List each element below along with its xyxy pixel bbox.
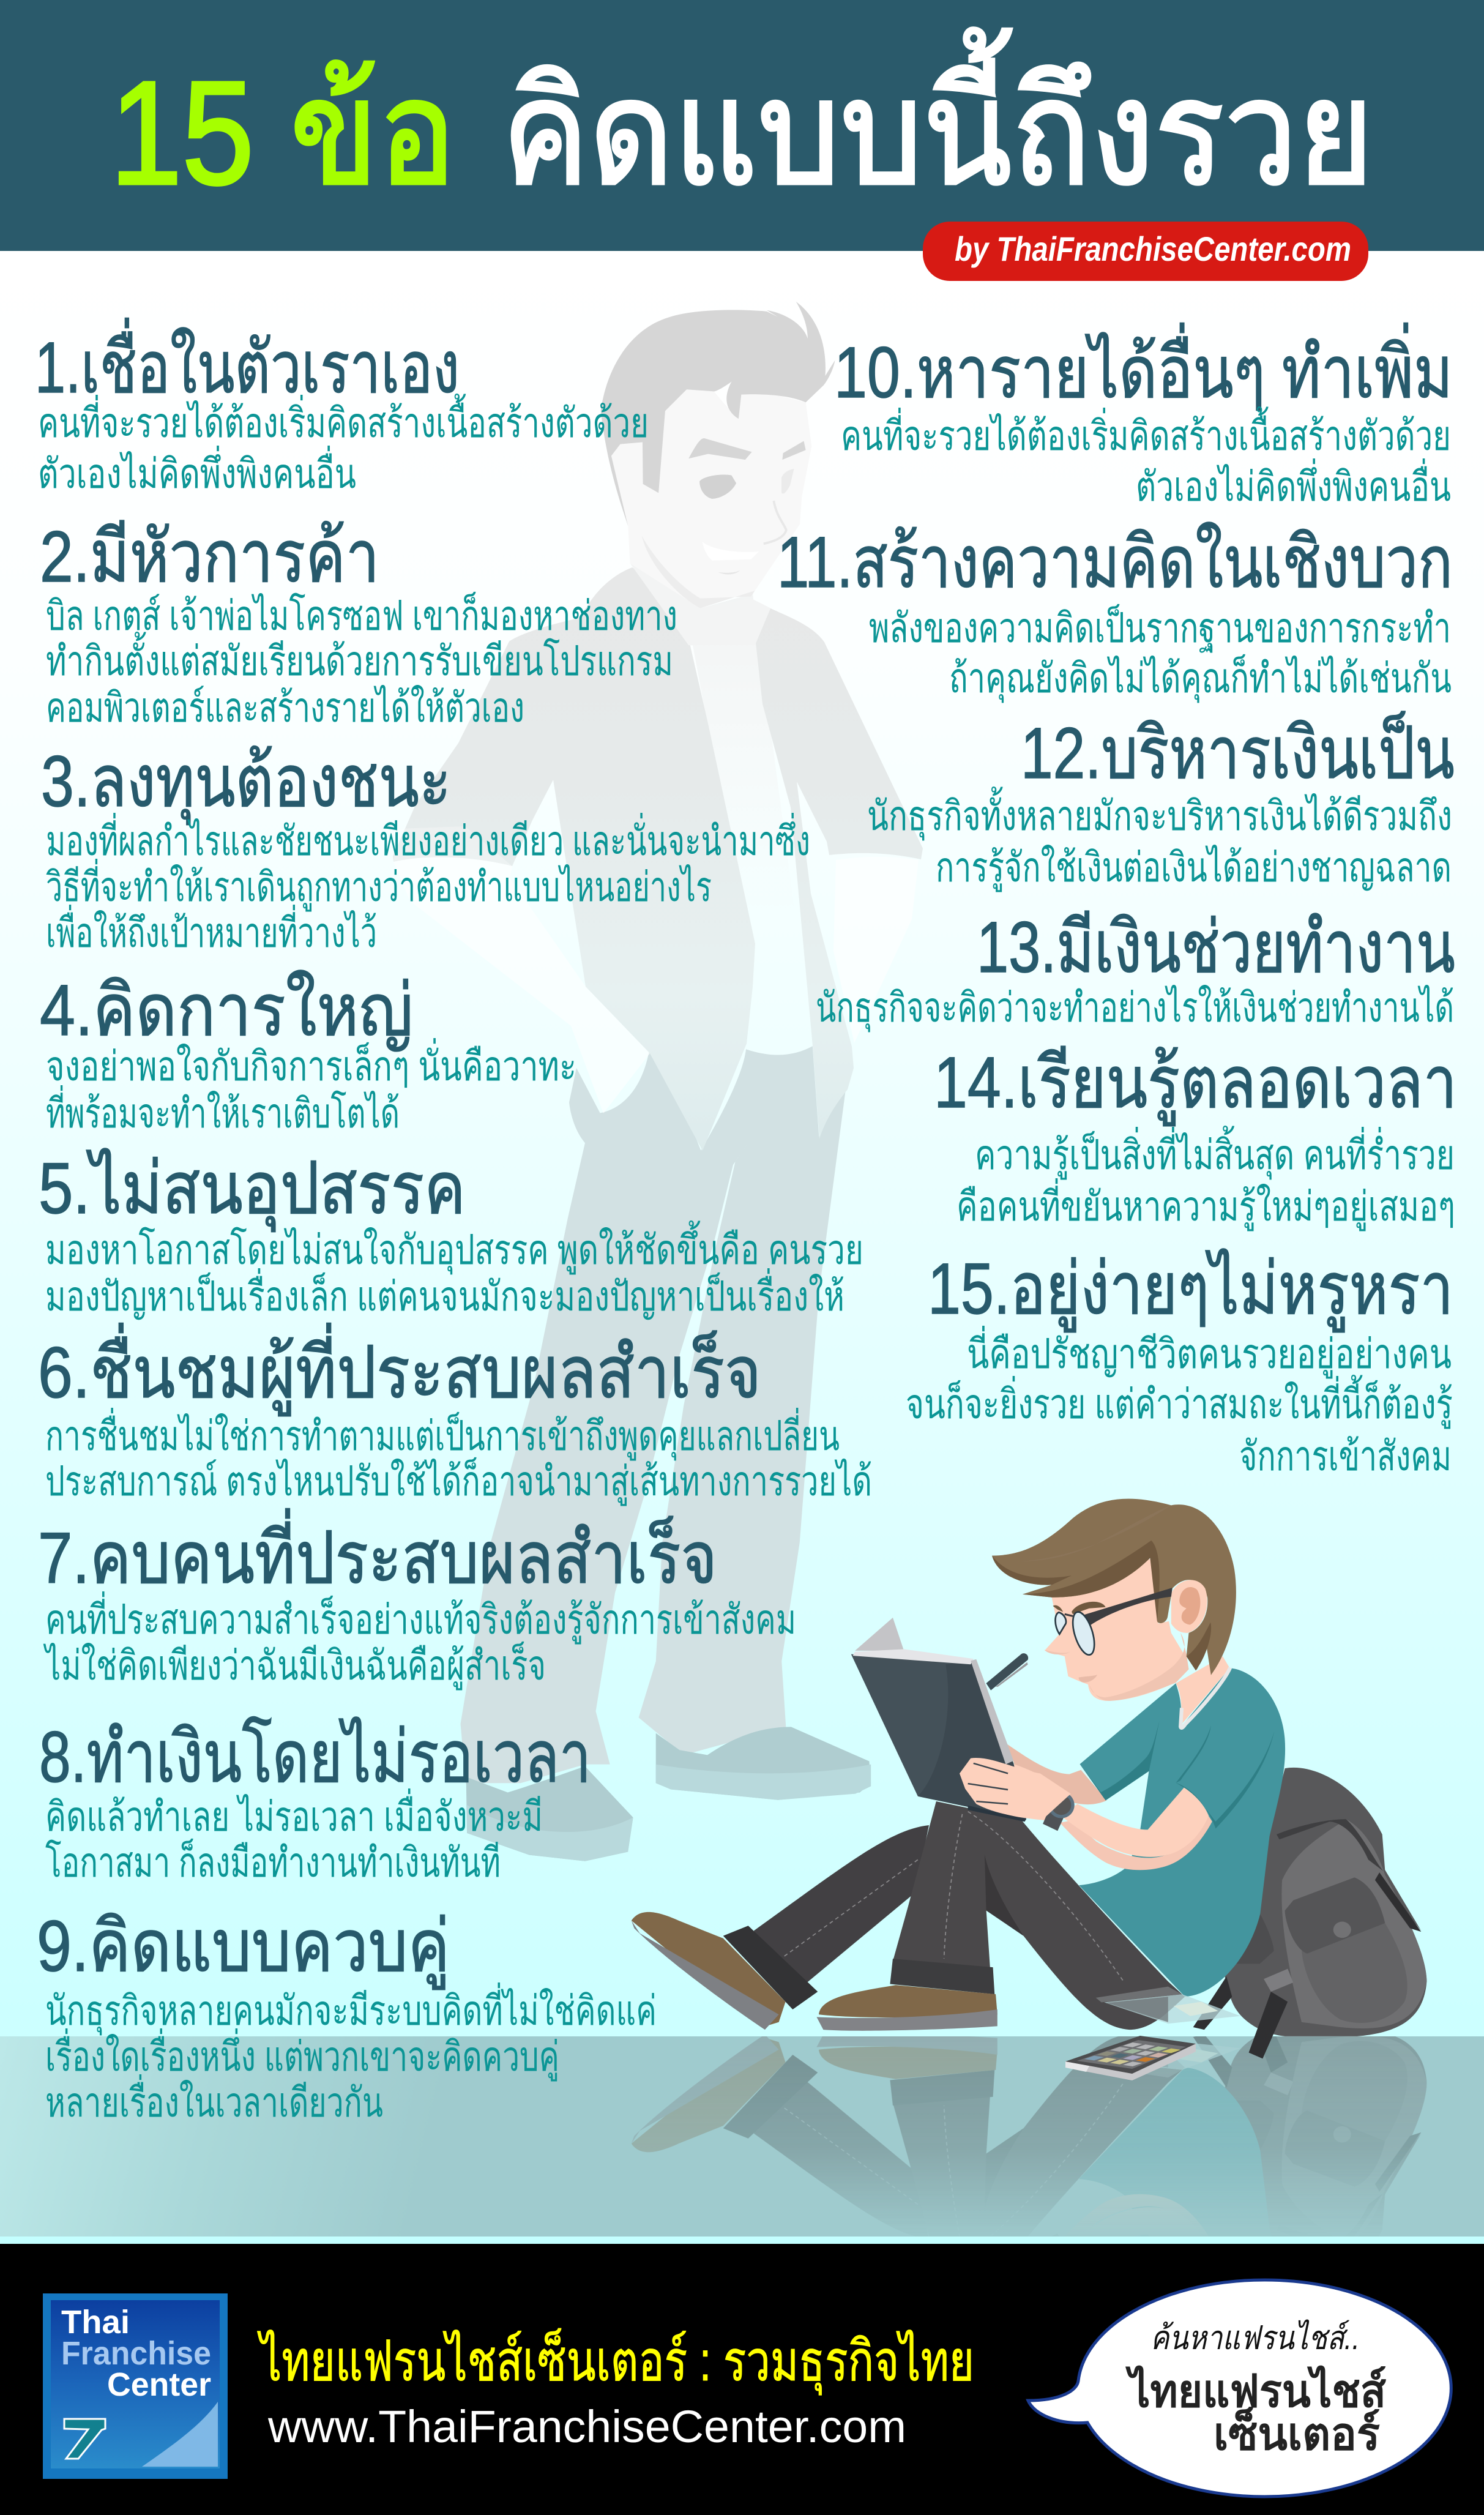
body 9: นักธุรกิจหลายคนมักจะมีระบบคิดที่ไม่ใช่คิดแค่ — [45, 1982, 657, 2036]
body 1: ตัวเองไม่คิดพึ่งพิงคนอื่น — [38, 446, 356, 497]
tip 8 — [39, 1717, 591, 1886]
lower cyan strip — [0, 2237, 1484, 2244]
heading 9: 9.คิดแบบควบคู่ — [37, 1906, 450, 1990]
bubble text: ค้นหาแฟรนไชส์.. — [1150, 2319, 1360, 2356]
title: 15 ข้อ — [110, 51, 456, 215]
background illustration: standing man silhouette — [393, 302, 923, 1861]
heading 1: 1.เชื่อในตัวเราเอง — [35, 318, 460, 408]
tip 11 — [777, 522, 1453, 703]
tablet — [1096, 1987, 1240, 2024]
heading 7: 7.คบคนที่ประสบผลสำเร็จ — [38, 1508, 717, 1599]
speech bubble — [1028, 2280, 1451, 2497]
logo wordmark: Franchise — [61, 2335, 211, 2372]
heading 6: 6.ชื่นชมผู้ที่ประสบผลสำเร็จ — [38, 1323, 761, 1416]
body 2: ทำกินตั้งแต่สมัยเรียนด้วยการรับเขียนโปรแกรม — [46, 632, 673, 684]
logo corner shape — [142, 2402, 218, 2467]
tip 10 — [834, 323, 1453, 510]
tip 9 — [37, 1906, 657, 2126]
body 6: ประสบการณ์ ตรงไหนปรับใช้ได้ก็อาจนำมาสู่เส้นทางการรวยได้ — [45, 1457, 872, 1506]
body 7: ไม่ใช่คิดเพียงว่าฉันมีเงินฉันคือผู้สำเร็จ — [43, 1641, 546, 1691]
book and hand fingers — [851, 1618, 1071, 1822]
footer band — [0, 2244, 1484, 2515]
body 11 — [869, 604, 1452, 703]
phone on floor — [1065, 2036, 1196, 2080]
body 7: คนที่ประสบความสำเร็จอย่างแท้จริงต้องรู้จักการเข้าสังคม — [45, 1591, 796, 1645]
bubble text: ไทยแฟรนไชส์ — [1125, 2364, 1387, 2416]
body 5: มองปัญหาเป็นเรื่องเล็ก แต่คนจนมักจะมองปัญหาเป็นเรื่องให้ — [45, 1268, 845, 1320]
footer url: www.ThaiFranchiseCenter.com — [267, 2401, 906, 2452]
body 9 — [45, 1982, 657, 2126]
tip 6 — [38, 1323, 872, 1506]
body 10 — [841, 406, 1451, 510]
body 12 — [867, 787, 1452, 892]
byline pill: by ThaiFranchiseCenter.com — [955, 230, 1351, 268]
body 9: เรื่องใดเรื่องหนึ่ง แต่พวกเขาจะคิดควบคู่ — [45, 2028, 559, 2082]
body 1: คนที่จะรวยได้ต้องเริ่มคิดสร้างเนื้อสร้างตัวด้วย — [38, 394, 649, 446]
logo wordmark: Thai — [61, 2304, 130, 2341]
body 2: คอมพิวเตอร์และสร้างรายได้ให้ตัวเอง — [46, 684, 524, 731]
shirt, head, arm — [979, 1499, 1285, 1997]
heading 2: 2.มีหัวการค้า — [40, 517, 379, 597]
logo wordmark — [61, 2304, 211, 2403]
title — [110, 28, 1374, 215]
body 9: หลายเรื่องในเวลาเดียวกัน — [45, 2074, 383, 2126]
body 3 — [46, 813, 810, 956]
backpack — [1193, 1768, 1426, 2058]
body 15 — [906, 1326, 1453, 1479]
body 8 — [45, 1788, 543, 1886]
title: คิดแบบนี้ถึงรวย — [502, 28, 1374, 215]
body 6 — [45, 1408, 872, 1506]
tip 3 — [41, 741, 810, 956]
logo wordmark: Center — [107, 2366, 211, 2403]
body 14 — [956, 1126, 1455, 1231]
logo arrow icon — [64, 2419, 105, 2459]
tip 13 — [816, 907, 1455, 1033]
header band — [0, 0, 1484, 251]
bubble text: เซ็นเตอร์ — [1214, 2407, 1380, 2459]
footer heading: ไทยแฟรนไชส์เซ็นเตอร์ : รวมธุรกิจไทย — [257, 2328, 974, 2396]
body 5: มองหาโอกาสโดยไม่สนใจกับอุปสรรค พูดให้ชัดขึ้นคือ คนรวย — [45, 1220, 863, 1275]
floor panel with reflection — [0, 2036, 1484, 2237]
body 3: วิธีที่จะทำให้เราเดินถูกทางว่าต้องทำแบบไหนอย่างไร — [46, 859, 712, 912]
body 2 — [46, 591, 677, 731]
heading 8: 8.ทำเงินโดยไม่รอเวลา — [39, 1717, 591, 1798]
tip 5 — [39, 1148, 863, 1320]
byline pill — [923, 222, 1368, 281]
body 3: มองที่ผลกำไรและชัยชนะเพียงอย่างเดียว และนั่นจะนำมาซึ่ง — [46, 813, 810, 864]
body 7 — [43, 1591, 796, 1691]
tip 1 — [35, 318, 649, 497]
logo: Thai Franchise Center — [43, 2293, 228, 2479]
tip 12 — [867, 711, 1455, 892]
body 2: บิล เกตส์ เจ้าพ่อไมโครซอฟ เขาก็มองหาช่องทาง — [46, 591, 677, 639]
tip 4 — [40, 970, 576, 1137]
heading 5: 5.ไม่สนอุปสรรค — [39, 1148, 466, 1233]
body 4 — [46, 1038, 576, 1137]
body 4: จงอย่าพอใจกับกิจการเล็กๆ นั่นคือวาทะ — [46, 1038, 576, 1089]
body 6: การชื่นชมไม่ใช่การทำตามแต่เป็นการเข้าถึงพูดคุยแลกเปลี่ยน — [45, 1408, 840, 1461]
tip 2 — [40, 517, 677, 731]
body 8: คิดแล้วทำเลย ไม่รอเวลา เมื่อจังหวะมี — [45, 1788, 543, 1840]
body 4: ที่พร้อมจะทำให้เราเติบโตได้ — [46, 1085, 400, 1137]
body 8: โอกาสมา ก็ลงมือทำงานทำเงินทันที — [45, 1838, 501, 1886]
tip 15 — [906, 1249, 1453, 1479]
body 1 — [38, 394, 649, 497]
body 5 — [45, 1220, 863, 1320]
heading 3: 3.ลงทุนต้องชนะ — [41, 741, 451, 826]
tip 14 — [934, 1042, 1457, 1231]
heading 4: 4.คิดการใหญ่ — [40, 970, 413, 1052]
bubble text — [1125, 2319, 1387, 2459]
body 3: เพื่อให้ถึงเป้าหมายที่วางไว้ — [46, 905, 377, 956]
illustration: student reading with backpack — [632, 1499, 1426, 2058]
tip 7 — [38, 1508, 796, 1691]
legs and shoes — [632, 1801, 1185, 2031]
